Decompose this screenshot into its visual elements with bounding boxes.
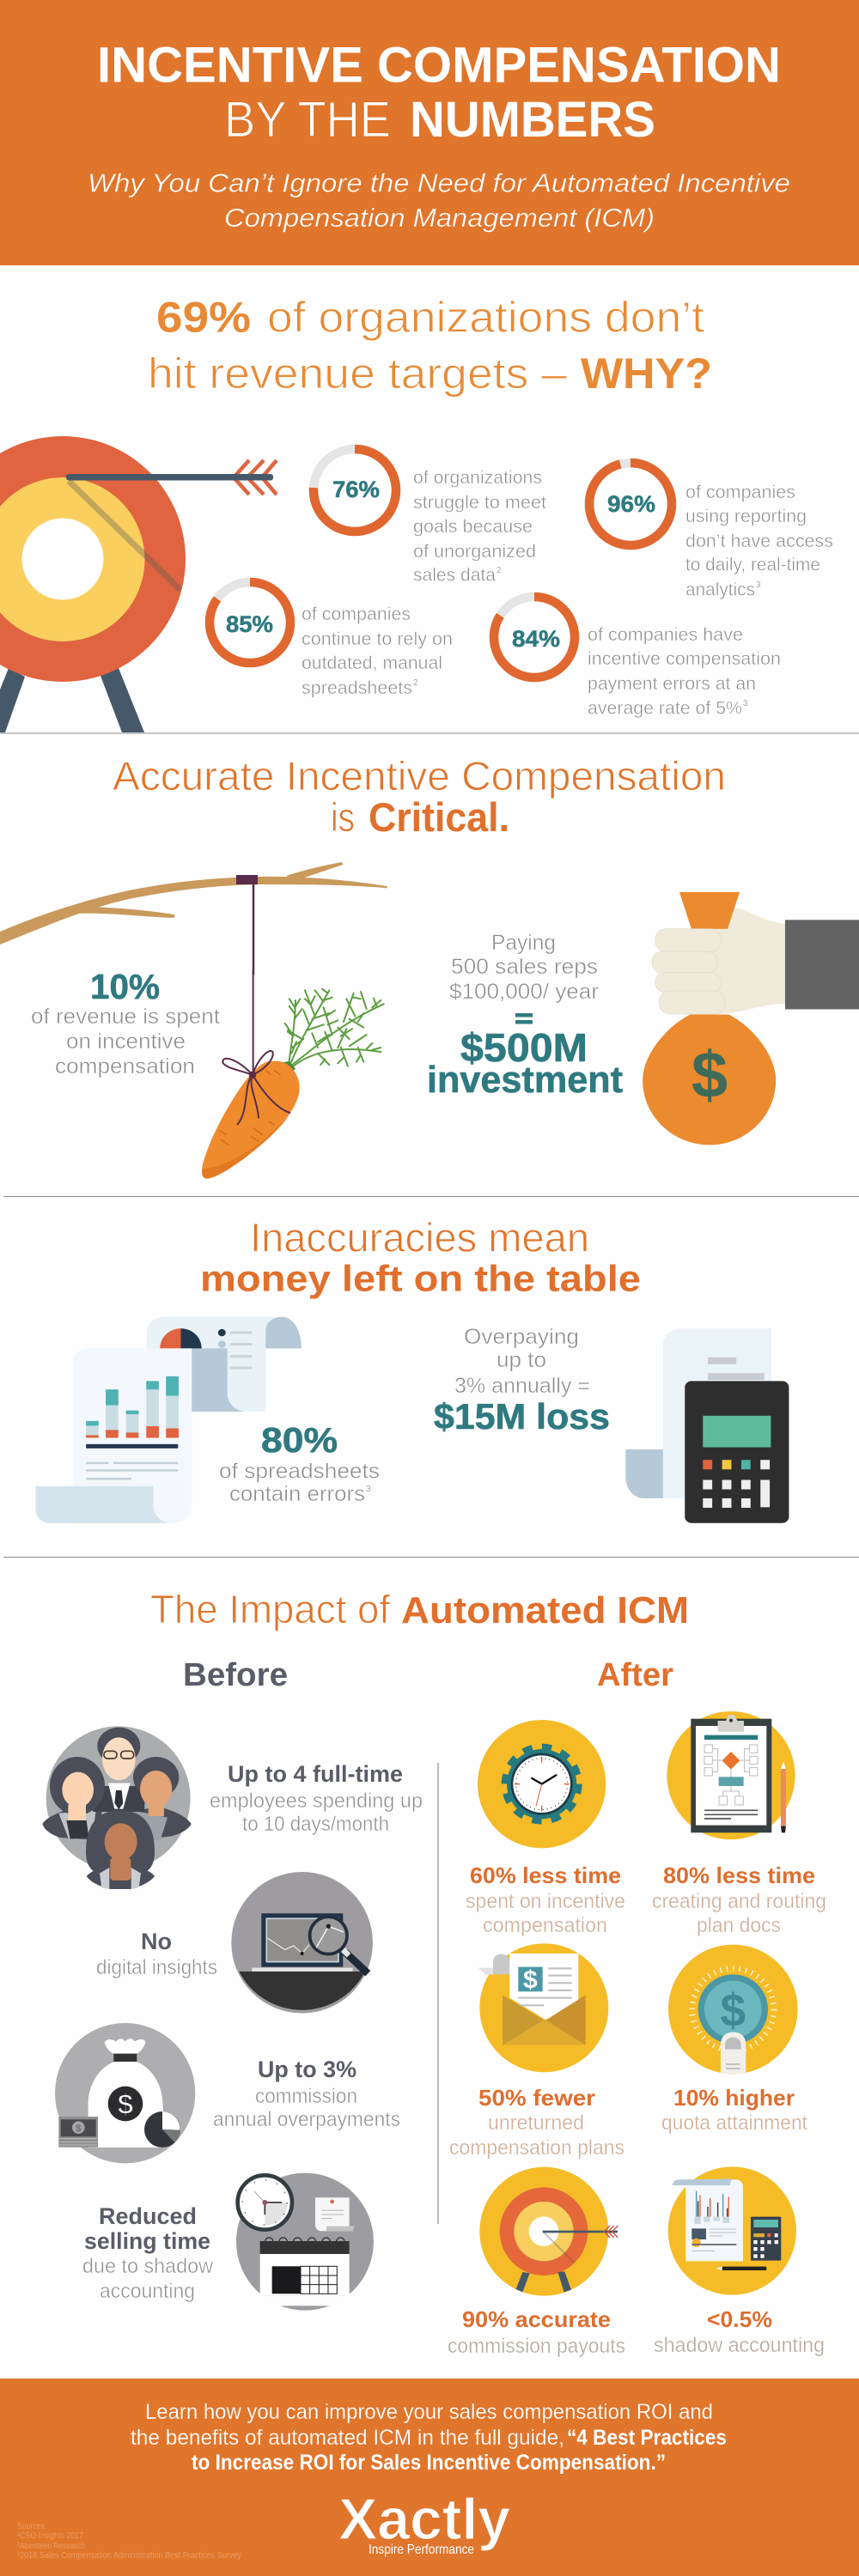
stat: 96%: 96% bbox=[607, 491, 655, 517]
icon: string bow bbox=[222, 970, 289, 1124]
stat: 50% fewer: unreturned bbox=[488, 2111, 584, 2135]
panel: footer banner bbox=[0, 2379, 859, 2576]
stat: 76%: sales data bbox=[413, 565, 496, 586]
logo: Xactly: Xactly bbox=[338, 2487, 510, 2552]
stat: 76%: goals because bbox=[413, 517, 533, 537]
stat: up to 3%: Up to 3% bbox=[258, 2057, 356, 2082]
stat: 50% fewer: 50% fewer bbox=[478, 2085, 595, 2111]
stat: 80% of spreadsheets bbox=[219, 1420, 380, 1506]
stat: 10% of revenue: of revenue is spent bbox=[31, 1005, 220, 1029]
stat: 85%: continue to rely on bbox=[302, 629, 453, 649]
icon: branch with string bbox=[0, 862, 387, 975]
stat: up to 3%: commission bbox=[255, 2085, 357, 2108]
icon: payment terminal with receipt bbox=[625, 1328, 789, 1523]
stat: up to 3%: annual overpayments bbox=[213, 2108, 400, 2131]
stat: $15M loss: 3% annually = bbox=[454, 1374, 590, 1398]
stat: 96% bbox=[589, 463, 833, 599]
heading: accurate incentive compensation: Critical. bbox=[369, 794, 509, 840]
stat: 84%: 3 bbox=[743, 699, 748, 708]
stat: 76%: struggle to meet bbox=[413, 493, 546, 513]
icon: clock, note and calendar bbox=[236, 2173, 374, 2311]
stat: 10% of revenue: compensation bbox=[55, 1054, 195, 1078]
stat: 96%: using reporting bbox=[685, 507, 807, 526]
icon: coin with finger: $ bbox=[720, 1985, 746, 2036]
stat: up to 4 full-time: Up to 4 full-time bbox=[228, 1761, 403, 1787]
stat: 60% less time: compensation bbox=[483, 1914, 607, 1937]
stat: reduced selling time bbox=[82, 2203, 214, 2303]
icon: hand holding money bag bbox=[643, 892, 859, 1145]
call to action text: Learn how you can improve your sales compensation ROI and bbox=[145, 2400, 713, 2424]
stat: 85% bbox=[210, 582, 453, 698]
stat: 80% less time: creating and routing bbox=[652, 1890, 826, 1913]
stat: 85%: 2 bbox=[413, 678, 418, 688]
stat: 90% accurate: 90% accurate bbox=[462, 2306, 611, 2332]
stat: 80% of spreadsheets: contain errors bbox=[229, 1482, 365, 1506]
stat: no digital insights bbox=[96, 1929, 217, 1979]
title bbox=[97, 38, 781, 148]
heading: the impact of automated ICM: Automated ICM bbox=[401, 1589, 689, 1631]
icon: hand holding money bag: $ bbox=[691, 1039, 728, 1112]
stat: 76% bbox=[314, 449, 546, 586]
stat: up to 4 full-time: to 10 days/month bbox=[242, 1813, 389, 1836]
stat: 60% less time: spent on incentive bbox=[466, 1890, 625, 1913]
stat: 96%: analytics bbox=[685, 580, 755, 599]
stat: 80% of spreadsheets: 3 bbox=[366, 1485, 371, 1494]
icon: coin with finger bbox=[668, 1945, 798, 2074]
heading: the impact of automated ICM: The Impact of bbox=[150, 1587, 390, 1631]
heading: 69% of organizations: WHY? bbox=[581, 349, 712, 398]
icon: clipboard bbox=[667, 1711, 795, 1839]
icon: envelope with letter: $ bbox=[523, 1965, 538, 1994]
stat: 10% of revenue: 10% bbox=[90, 967, 160, 1006]
stat: $15M loss: up to bbox=[497, 1348, 546, 1372]
heading: inaccuracies mean money left on the table: Inaccuracies mean bbox=[250, 1214, 589, 1261]
stat: $500M investment: Paying bbox=[491, 931, 556, 955]
heading: accurate incentive compensation: Accurate Incentive Compensation bbox=[113, 753, 726, 799]
call to action text: the benefits of automated ICM in the full guide, bbox=[131, 2426, 564, 2450]
stat: 10% higher bbox=[661, 2085, 807, 2135]
icon: target on yellow bbox=[479, 2167, 618, 2296]
title: INCENTIVE COMPENSATION bbox=[97, 38, 781, 93]
stat: 85%: of companies bbox=[302, 605, 411, 624]
stat: reduced selling time: selling time bbox=[84, 2228, 210, 2254]
subtitle: Why You Can’t Ignore the Need for Automated Incentive bbox=[88, 168, 790, 197]
stat: 84%: incentive compensation bbox=[588, 649, 781, 669]
icon: carrot bbox=[202, 970, 384, 1179]
stat: 50% fewer: compensation plans bbox=[449, 2136, 624, 2160]
call to action text bbox=[131, 2400, 727, 2475]
heading: 69% of organizations: of organizations don’t bbox=[267, 294, 704, 342]
icon: laptop with magnifier bbox=[231, 1872, 373, 2014]
sources: ¹CSO Insights 2017 bbox=[17, 2531, 83, 2541]
sources: ³2016 Sales Compensation Administration Best Practices Survey bbox=[17, 2551, 241, 2561]
stat: $500M investment: 500 sales reps bbox=[451, 955, 598, 979]
call to action text: to Increase ROI for Sales Incentive Compensation.” bbox=[192, 2451, 666, 2475]
icon: money bag with pie: $ bbox=[76, 2123, 82, 2134]
heading: 69% of organizations: hit revenue targets – bbox=[148, 349, 567, 398]
heading: after: After bbox=[597, 1657, 673, 1693]
heading: accurate incentive compensation bbox=[113, 753, 726, 840]
title: BY THE bbox=[224, 92, 391, 148]
stat: $15M loss bbox=[434, 1325, 610, 1437]
stat: $15M loss: $15M loss bbox=[434, 1396, 610, 1437]
heading: before: Before bbox=[183, 1657, 288, 1693]
stat: 60% less time: 60% less time bbox=[470, 1862, 621, 1888]
logo: Xactly: Inspire Performance bbox=[369, 2543, 474, 2557]
stat: 90% accurate bbox=[448, 2306, 625, 2358]
heading: the impact of automated ICM bbox=[150, 1587, 689, 1631]
heading: inaccuracies mean money left on the table: money left on the table bbox=[200, 1259, 641, 1300]
heading: inaccuracies mean money left on the table bbox=[200, 1214, 641, 1300]
sources: Sources: bbox=[17, 2522, 46, 2531]
panel: header banner bbox=[0, 0, 859, 265]
stat: 76%: 76% bbox=[332, 477, 380, 502]
stat: 80% less time bbox=[652, 1862, 826, 1937]
heading: accurate incentive compensation: is bbox=[331, 794, 355, 840]
icon: gear clock bbox=[478, 1720, 606, 1848]
sources: ²Aberdeen Research bbox=[17, 2542, 85, 2551]
stat: 10% of revenue bbox=[31, 967, 220, 1078]
icon: spreadsheets bbox=[35, 1317, 302, 1523]
stat: no digital insights: digital insights bbox=[96, 1956, 217, 1979]
call to action text: “4 Best Practices bbox=[567, 2426, 727, 2450]
subtitle: Compensation Management (ICM) bbox=[224, 203, 655, 233]
icon: team of four people bbox=[42, 1726, 192, 1889]
stat: up to 4 full-time: employees spending up bbox=[210, 1789, 423, 1813]
stat: no digital insights: No bbox=[141, 1929, 172, 1954]
icon: report and calculator bbox=[668, 2166, 796, 2295]
sources bbox=[17, 2522, 241, 2561]
stat: 85%: outdated, manual bbox=[302, 653, 442, 673]
stat: 90% accurate: commission payouts bbox=[448, 2335, 625, 2358]
stat: 60% less time bbox=[466, 1862, 625, 1937]
stat: $500M investment bbox=[427, 931, 623, 1101]
stat: $500M investment: $100,000/ year bbox=[449, 980, 599, 1004]
stat: $15M loss: Overpaying bbox=[464, 1325, 579, 1349]
stat: $500M investment: $500M bbox=[460, 1025, 588, 1070]
title: NUMBERS bbox=[410, 92, 655, 148]
heading: 69% of organizations bbox=[148, 294, 712, 398]
stat: 10% of revenue: on incentive bbox=[66, 1030, 186, 1054]
stat: 80% of spreadsheets: of spreadsheets bbox=[219, 1460, 380, 1484]
subtitle bbox=[88, 168, 790, 233]
stat: 76%: 2 bbox=[497, 566, 502, 575]
stat: up to 3% bbox=[213, 2057, 400, 2131]
stat: 80% less time: plan docs bbox=[697, 1914, 781, 1937]
stat: reduced selling time: due to shadow bbox=[82, 2255, 214, 2278]
stat: 84%: payment errors at an bbox=[588, 674, 756, 694]
stat: 96%: of companies bbox=[685, 483, 795, 502]
stat: 80% less time: 80% less time bbox=[663, 1862, 815, 1888]
stat: 10% higher: quota attainment bbox=[661, 2111, 807, 2135]
stat: up to 4 full-time bbox=[210, 1761, 423, 1836]
stat: less than 0.5%: shadow accounting bbox=[654, 2334, 825, 2357]
stat: 84% bbox=[494, 597, 781, 718]
stat: 50% fewer bbox=[449, 2085, 624, 2160]
stat: reduced selling time: accounting bbox=[100, 2280, 195, 2303]
stat: 80% of spreadsheets: 80% bbox=[261, 1420, 338, 1460]
stat: less than 0.5% bbox=[654, 2306, 825, 2357]
stat: less than 0.5%: <0.5% bbox=[707, 2306, 772, 2332]
stat: 84%: 84% bbox=[512, 626, 560, 652]
stat: 76%: of unorganized bbox=[413, 542, 536, 562]
stat: 85%: spreadsheets bbox=[302, 678, 412, 698]
icon: money bag with pie bbox=[55, 2023, 195, 2163]
stat: $500M investment: investment bbox=[427, 1059, 623, 1101]
stat: 96%: don’t have access bbox=[685, 532, 833, 551]
stat: 10% higher: 10% higher bbox=[673, 2085, 795, 2111]
icon: money bag with pie: $ bbox=[118, 2089, 134, 2121]
stat: 84%: average rate of 5% bbox=[588, 699, 742, 718]
stat: 96%: to daily, real-time bbox=[685, 555, 820, 575]
icon: target with arrow bbox=[0, 436, 277, 732]
stat: 96%: 3 bbox=[756, 580, 761, 590]
icon: envelope with letter bbox=[478, 1943, 608, 2072]
stat: 85%: 85% bbox=[226, 611, 273, 637]
heading: 69% of organizations: 69% bbox=[156, 294, 251, 342]
stat: 76%: of organizations bbox=[413, 468, 542, 488]
stat: reduced selling time: Reduced bbox=[99, 2203, 197, 2229]
stat: 84%: of companies have bbox=[588, 625, 743, 645]
